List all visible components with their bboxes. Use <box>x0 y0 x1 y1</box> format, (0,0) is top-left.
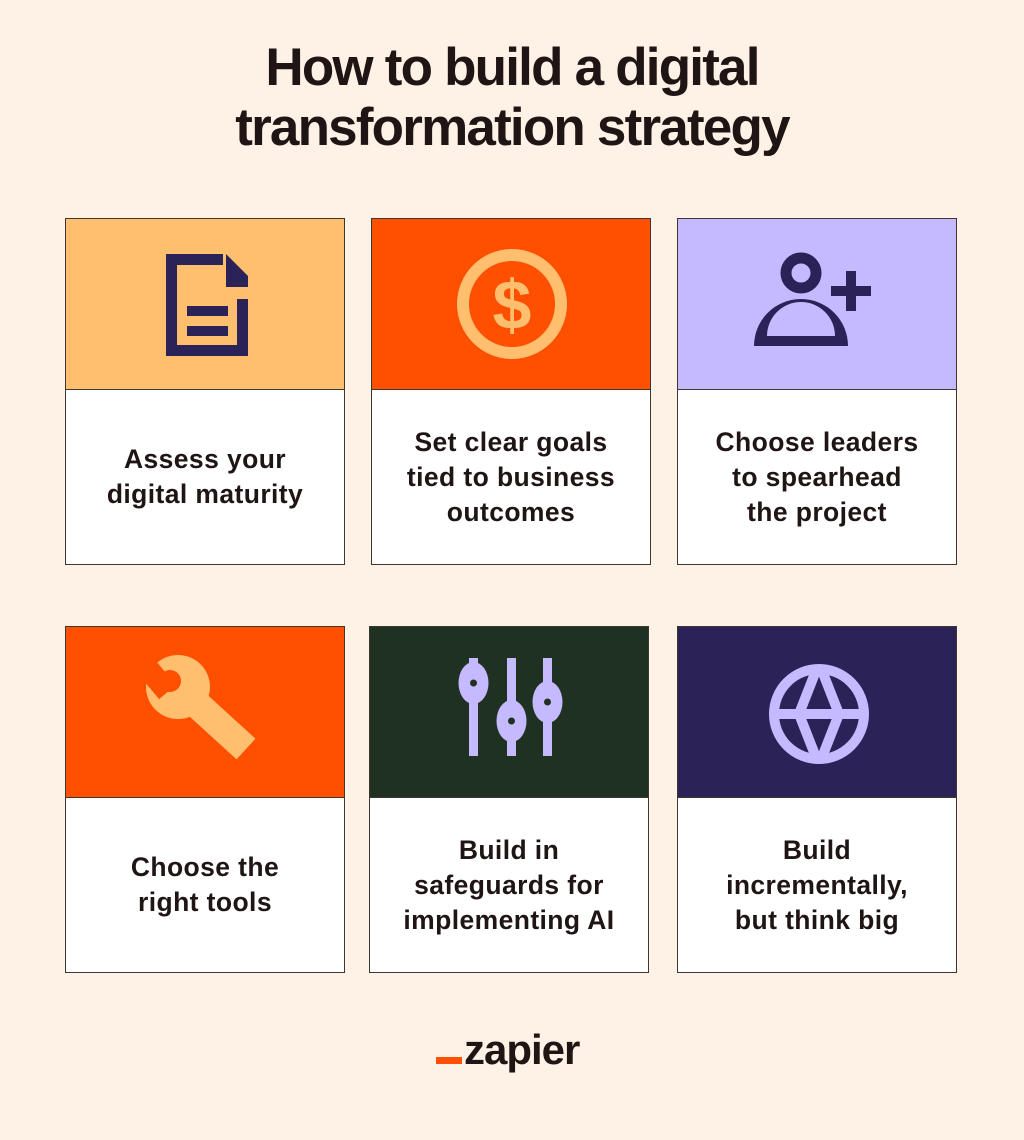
icon: wrench <box>66 627 344 798</box>
text: Choose leaders <box>716 426 918 456</box>
panel: assess digital maturity <box>65 218 345 565</box>
text: right tools <box>138 887 272 917</box>
panel: set clear goals <box>371 218 651 565</box>
text: digital maturity <box>107 479 303 509</box>
text: Build <box>783 834 851 864</box>
text <box>403 834 615 934</box>
text: to spearhead <box>732 462 902 492</box>
title: How to build a digital <box>265 38 759 97</box>
text: Choose the <box>131 852 279 882</box>
panel: build incrementally <box>677 626 957 973</box>
text <box>407 426 615 526</box>
text <box>107 444 303 509</box>
icon: dollar coin: $ <box>493 266 531 344</box>
text: safeguards for <box>414 870 604 900</box>
text: Set clear goals <box>414 426 608 456</box>
text: incrementally, <box>726 870 908 900</box>
text: outcomes <box>447 496 575 526</box>
text: tied to business <box>407 462 615 492</box>
text <box>726 834 908 934</box>
title: transformation strategy <box>235 98 789 157</box>
text: Assess your <box>124 444 286 474</box>
title <box>235 38 790 157</box>
text: Build in <box>459 834 559 864</box>
icon: globe <box>678 627 956 798</box>
icon: sliders <box>370 627 648 798</box>
panel: choose leaders <box>677 218 957 565</box>
text: the project <box>747 496 887 526</box>
text: implementing AI <box>403 904 615 934</box>
icon: document <box>66 219 344 390</box>
panel: choose the right tools <box>65 626 345 973</box>
text: but think big <box>735 904 899 934</box>
icon: dollar coin <box>372 219 650 390</box>
logo: zapier: zapier <box>464 1026 579 1073</box>
panel: safeguards for AI <box>369 626 649 973</box>
text <box>716 426 918 526</box>
text <box>131 852 279 917</box>
icon: add person <box>678 219 956 390</box>
